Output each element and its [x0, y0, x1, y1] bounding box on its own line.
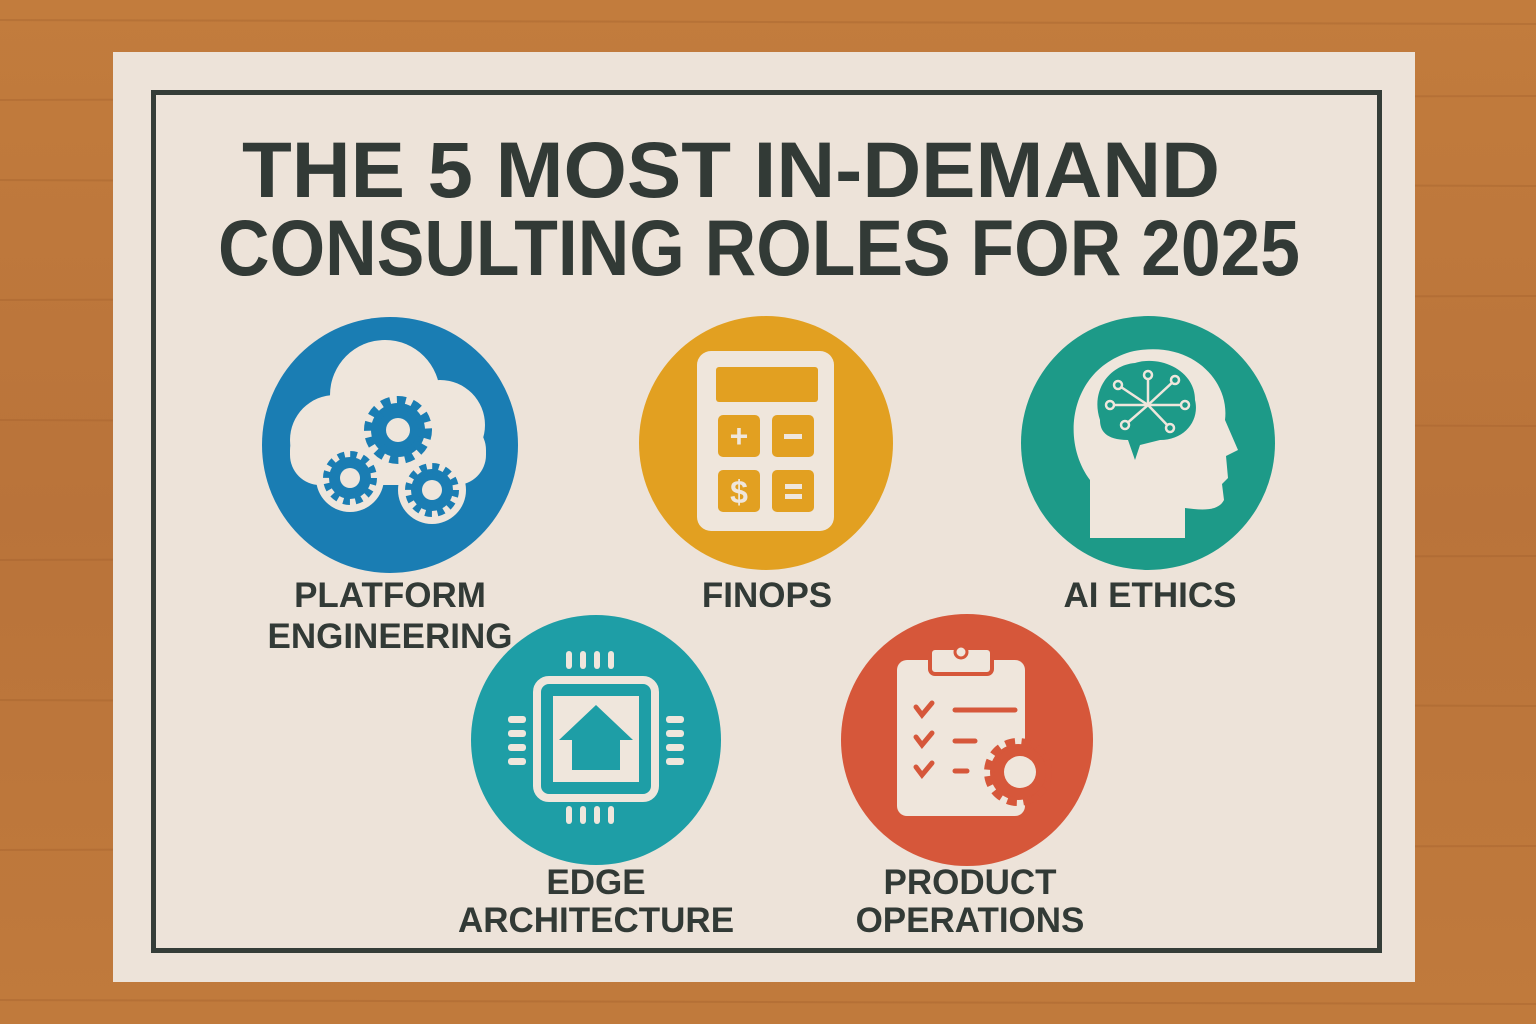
panel: finops: [639, 316, 893, 615]
label: [458, 863, 734, 940]
label: PLATFORM: [294, 576, 486, 615]
label: ARCHITECTURE: [458, 901, 734, 940]
title: [218, 125, 1300, 292]
icon: cloud gears: [262, 317, 518, 573]
panel: edge architecture: [458, 615, 734, 940]
panel: ai ethics: [1021, 316, 1275, 615]
label: [267, 576, 513, 656]
card: [113, 52, 1415, 982]
title: CONSULTING ROLES FOR 2025: [218, 203, 1300, 292]
label: PRODUCT: [883, 863, 1057, 902]
label: AI ETHICS: [1063, 576, 1237, 615]
label: OPERATIONS: [856, 901, 1084, 940]
icon: head brain: [1021, 316, 1275, 570]
label: FINOPS: [702, 576, 832, 615]
icon: clipboard gear: [841, 614, 1093, 866]
panel: product operations: [841, 614, 1093, 940]
label: [856, 863, 1084, 940]
label: ENGINEERING: [267, 617, 513, 656]
panel: platform engineering: [262, 317, 518, 656]
icon: calculator: [639, 316, 893, 570]
icon: chip house: [471, 615, 721, 865]
icon: calculator: $: [730, 474, 748, 510]
icon: calculator: +: [730, 418, 748, 454]
title: THE 5 MOST IN-DEMAND: [242, 125, 1220, 214]
label: EDGE: [546, 863, 646, 902]
